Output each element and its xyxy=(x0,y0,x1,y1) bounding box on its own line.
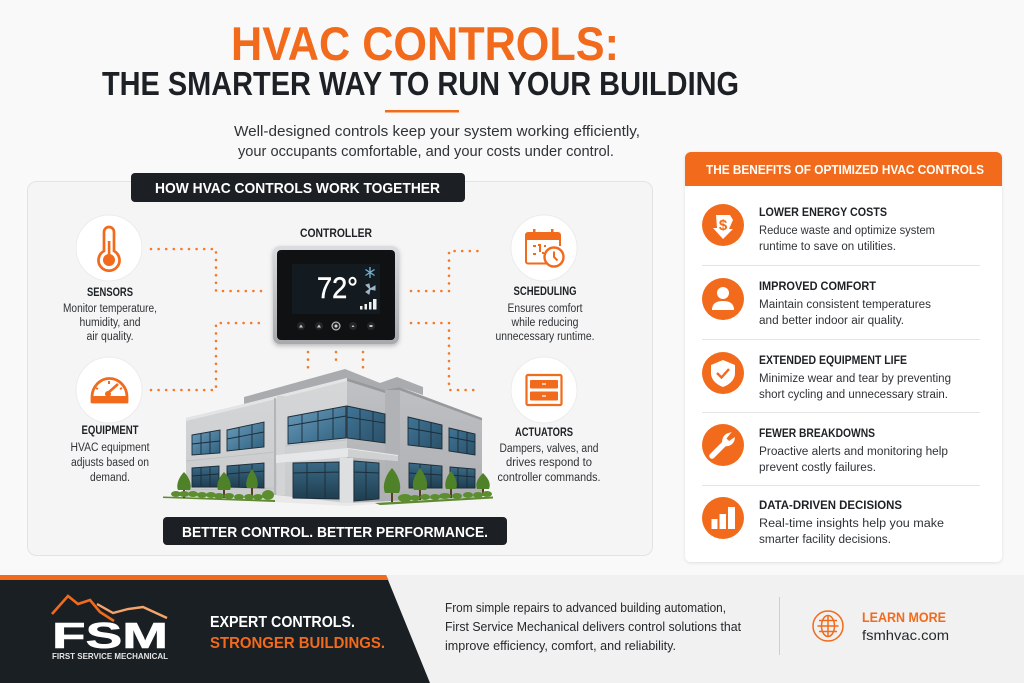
sensors text: Monitor temperature, xyxy=(63,303,157,315)
benefit: extended equipment life: EXTENDED EQUIPMENT LIFE xyxy=(759,353,907,367)
logo xyxy=(52,596,168,661)
scheduling text: SCHEDULING xyxy=(514,286,577,298)
learn more xyxy=(862,610,949,643)
scheduling xyxy=(496,215,594,343)
benefit: fewer breakdowns xyxy=(702,424,948,474)
intro text xyxy=(234,123,640,160)
walls xyxy=(186,378,347,503)
benefit: lower energy costs: runtime to save on utilities. xyxy=(759,241,896,253)
title accent rule xyxy=(385,110,459,112)
entrance canopy and column xyxy=(276,448,398,463)
equipment text: EQUIPMENT xyxy=(82,425,138,437)
footer description xyxy=(445,600,741,653)
scheduling text: unnecessary runtime. xyxy=(496,331,594,343)
footer xyxy=(0,575,1024,683)
icon: calendar and clock xyxy=(511,215,577,281)
rooftop xyxy=(244,369,423,404)
footer dark band xyxy=(0,575,430,683)
panel: benefits xyxy=(685,152,1002,562)
icon: gauge xyxy=(76,357,142,423)
benefit: lower energy costs: Reduce waste and optimize system xyxy=(759,225,935,237)
benefit: data-driven decisions: smarter facility decisions. xyxy=(759,534,891,546)
panel heading xyxy=(131,173,465,202)
benefit: data-driven decisions: DATA-DRIVEN DECISIONS xyxy=(759,498,902,512)
windows xyxy=(192,406,475,501)
learn more: fsmhvac.com xyxy=(862,627,949,643)
benefit: data-driven decisions: Real-time insights help you make xyxy=(759,518,944,530)
benefits heading xyxy=(685,152,1002,186)
tagline xyxy=(163,517,507,545)
benefit: extended equipment life: Minimize wear and tear by preventing xyxy=(759,373,951,385)
logo: FSM xyxy=(52,615,168,656)
footer description: From simple repairs to advanced building automation, xyxy=(445,600,726,615)
actuators text: Dampers, valves, and xyxy=(500,443,598,455)
benefit: data-driven decisions xyxy=(702,497,944,546)
footer description: improve efficiency, comfort, and reliability. xyxy=(445,638,676,653)
trees and shrubs xyxy=(171,468,492,502)
scheduling text: Ensures comfort xyxy=(508,303,583,315)
intro text: your occupants comfortable, and your costs under control. xyxy=(238,143,614,160)
equipment text: demand. xyxy=(90,472,130,484)
actuators text: ACTUATORS xyxy=(515,427,573,439)
controller label: CONTROLLER xyxy=(300,226,372,240)
connector arrows xyxy=(151,249,480,390)
benefit: lower energy costs: LOWER ENERGY COSTS xyxy=(759,205,887,219)
benefit: improved comfort: IMPROVED COMFORT xyxy=(759,279,877,293)
controller xyxy=(273,226,399,344)
icon: globe xyxy=(813,611,843,641)
footer description: First Service Mechanical delivers control solutions that xyxy=(445,619,741,634)
benefit: fewer breakdowns: Proactive alerts and monitoring help xyxy=(759,446,948,458)
title: THE SMARTER WAY TO RUN YOUR BUILDING xyxy=(102,65,739,102)
benefit: extended equipment life: short cycling and unnecessary strain. xyxy=(759,389,948,401)
equipment text xyxy=(70,425,150,484)
tagline: BETTER CONTROL. BETTER PERFORMANCE. xyxy=(182,524,488,541)
benefit: improved comfort: Maintain consistent temperatures xyxy=(759,299,931,311)
sensors text: SENSORS xyxy=(87,287,133,299)
sensors xyxy=(63,215,157,343)
icon: dollar arrow: $ xyxy=(719,217,728,234)
benefit: fewer breakdowns: FEWER BREAKDOWNS xyxy=(759,426,875,440)
panel: how controls work xyxy=(28,173,652,556)
sensors text: humidity, and xyxy=(80,317,140,329)
icon: person xyxy=(702,278,744,320)
benefit: improved comfort: and better indoor air quality. xyxy=(759,315,904,327)
benefit: lower energy costs xyxy=(702,204,935,253)
title: HVAC CONTROLS: xyxy=(231,17,619,70)
equipment text: HVAC equipment xyxy=(70,442,150,454)
icon: damper drawers xyxy=(511,357,577,423)
icon: dollar arrow xyxy=(702,204,744,246)
icon: thermometer xyxy=(76,215,142,281)
benefit: extended equipment life xyxy=(702,352,951,401)
learn more: LEARN MORE xyxy=(862,610,946,625)
building illustration xyxy=(163,369,493,506)
icon: wrench xyxy=(702,424,744,466)
actuators xyxy=(498,357,600,484)
panel heading: HOW HVAC CONTROLS WORK TOGETHER xyxy=(155,180,440,197)
intro text: Well-designed controls keep your system working efficiently, xyxy=(234,123,640,140)
scheduling text xyxy=(496,286,594,343)
title xyxy=(102,17,739,102)
ground xyxy=(163,495,493,506)
scheduling text: while reducing xyxy=(511,317,578,329)
footer slogan: STRONGER BUILDINGS. xyxy=(210,635,385,652)
actuators text: drives respond to xyxy=(506,457,592,469)
equipment text: adjusts based on xyxy=(71,457,149,469)
footer slogan xyxy=(210,614,385,652)
actuators text: controller commands. xyxy=(498,472,600,484)
footer slogan: EXPERT CONTROLS. xyxy=(210,614,355,631)
equipment xyxy=(70,357,150,484)
thermostat: 72° xyxy=(317,272,358,305)
sensors text: air quality. xyxy=(86,331,134,343)
icon: shield check xyxy=(702,352,744,394)
logo: FIRST SERVICE MECHANICAL xyxy=(52,651,168,661)
benefit: improved comfort xyxy=(702,278,931,327)
icon: bar chart xyxy=(702,497,744,539)
benefit: fewer breakdowns: prevent costly failures. xyxy=(759,462,876,474)
sensors text xyxy=(63,287,157,343)
benefits heading: THE BENEFITS OF OPTIMIZED HVAC CONTROLS xyxy=(706,162,984,177)
actuators text xyxy=(498,427,600,484)
